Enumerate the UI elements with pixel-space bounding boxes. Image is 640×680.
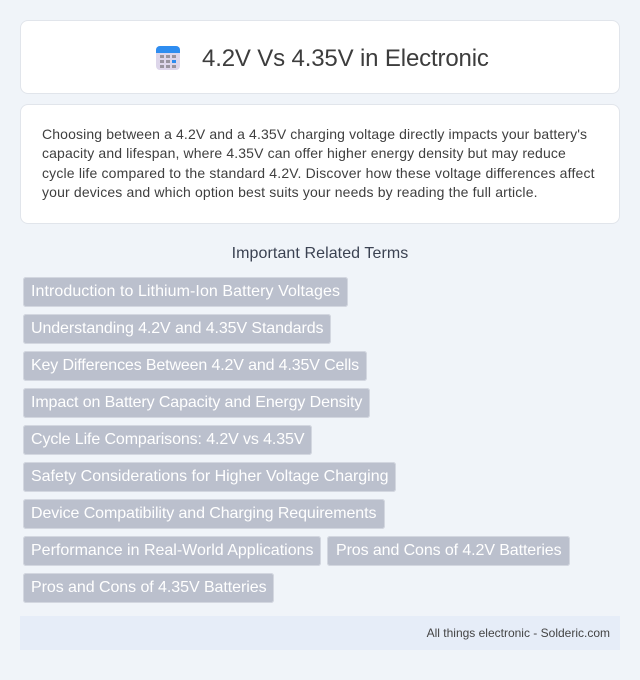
tag: safety: Safety Considerations for Higher Voltage Charging (31, 468, 388, 485)
intro text: cycle life compared to the standard 4.2V. Discover how these voltage differences affect (42, 165, 595, 181)
tag: safety (23, 462, 396, 492)
section heading: Important Related Terms (232, 245, 408, 262)
header panel (20, 20, 620, 94)
tag: capacity (23, 388, 370, 418)
intro text: capacity and lifespan, where 4.35V can offer higher energy density but may reduce (42, 145, 566, 161)
tag: introduction: Introduction to Lithium-Ion Battery Voltages (31, 283, 340, 300)
tag: compatibility (23, 499, 385, 529)
tag: pros and cons 4.2V: Pros and Cons of 4.2V Batteries (336, 542, 561, 559)
tag: key differences (23, 351, 367, 381)
title: 4.2V Vs 4.35V in Electronic (202, 45, 489, 72)
tag: cycle life (23, 425, 312, 455)
tag: standards (23, 314, 331, 344)
icon: calendar (156, 46, 180, 70)
tag: pros and cons 4.35V (23, 573, 274, 603)
footer text: All things electronic - Solderic.com (427, 626, 610, 640)
tag: capacity: Impact on Battery Capacity and Energy Density (31, 394, 362, 411)
footer bar (20, 616, 620, 650)
tag: key differences: Key Differences Between 4.2V and 4.35V Cells (31, 357, 359, 374)
intro text: Choosing between a 4.2V and a 4.35V charging voltage directly impacts your battery's (42, 126, 587, 142)
tag: pros and cons 4.35V: Pros and Cons of 4.35V Batteries (31, 579, 267, 596)
tag: introduction (23, 277, 348, 307)
intro text (42, 126, 595, 200)
tag: cycle life: Cycle Life Comparisons: 4.2V vs 4.35V (31, 431, 304, 448)
intro text: your devices and which option best suits your needs by reading the full article. (42, 184, 538, 200)
intro panel (20, 104, 620, 224)
tag: pros and cons 4.2V (327, 536, 570, 566)
tag: performance: Performance in Real-World Applications (31, 542, 314, 559)
tag: performance (23, 536, 321, 566)
tag: standards: Understanding 4.2V and 4.35V Standards (31, 320, 323, 337)
tag: compatibility: Device Compatibility and Charging Requirements (31, 505, 376, 522)
